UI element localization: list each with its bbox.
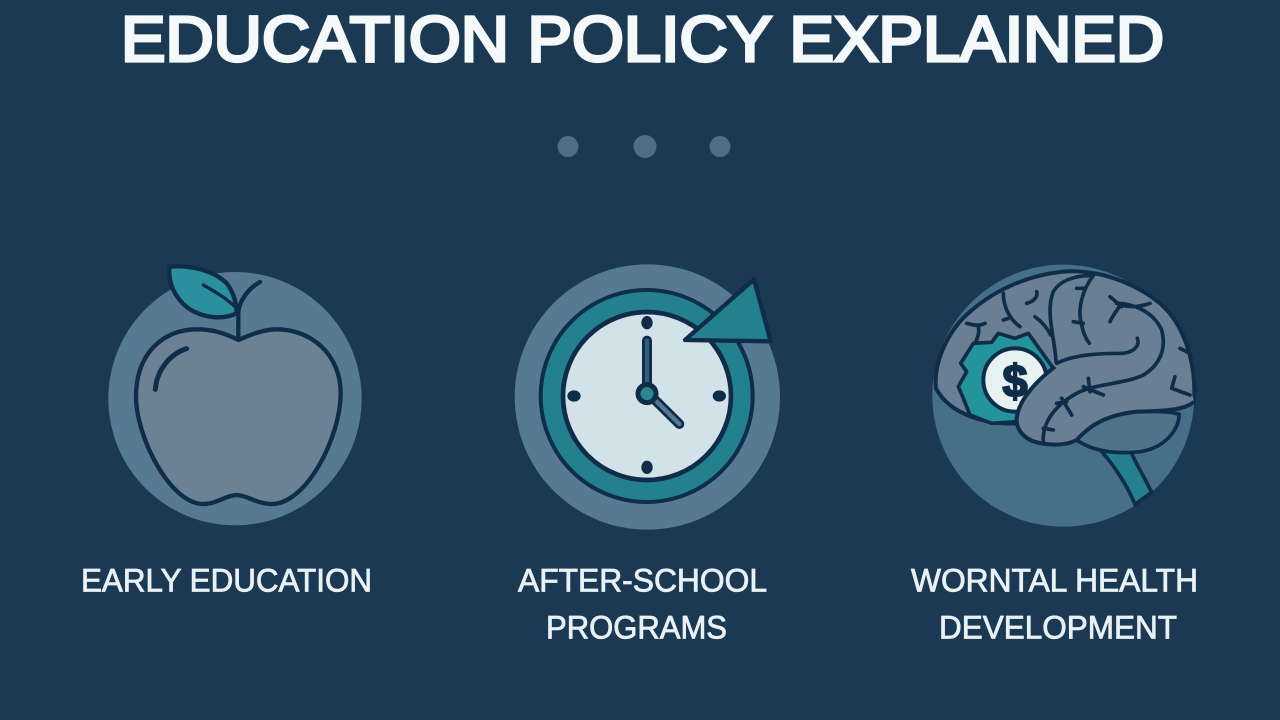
pagination dots (558, 135, 730, 158)
label: worntal health development (911, 562, 1198, 646)
icon: apple (108, 266, 362, 525)
folds (967, 276, 1190, 442)
dollar coin (983, 348, 1047, 412)
clock ticks (567, 316, 726, 474)
icon: clock with arrow (515, 264, 780, 530)
temporal lobe (1017, 365, 1194, 445)
label: after-school programs (518, 562, 767, 646)
brain cortex (936, 271, 1194, 440)
spinal cord (1102, 450, 1152, 504)
cerebellum (1077, 411, 1179, 453)
clock hands (647, 341, 679, 424)
label: early education: EARLY EDUCATION (81, 562, 372, 598)
icon: brain with gear and dollar coin: $ (1002, 355, 1028, 406)
label: worntal health development: DEVELOPMENT (939, 610, 1177, 646)
title: EDUCATION POLICY EXPLAINED (121, 3, 1164, 75)
arrow head (685, 279, 771, 341)
gear (958, 333, 1053, 423)
label: worntal health development: WORNTAL HEALTH (911, 562, 1198, 598)
icon: brain with gear and dollar coin (932, 265, 1194, 527)
label: after-school programs: AFTER-SCHOOL (518, 562, 767, 598)
label: after-school programs: PROGRAMS (546, 610, 727, 646)
